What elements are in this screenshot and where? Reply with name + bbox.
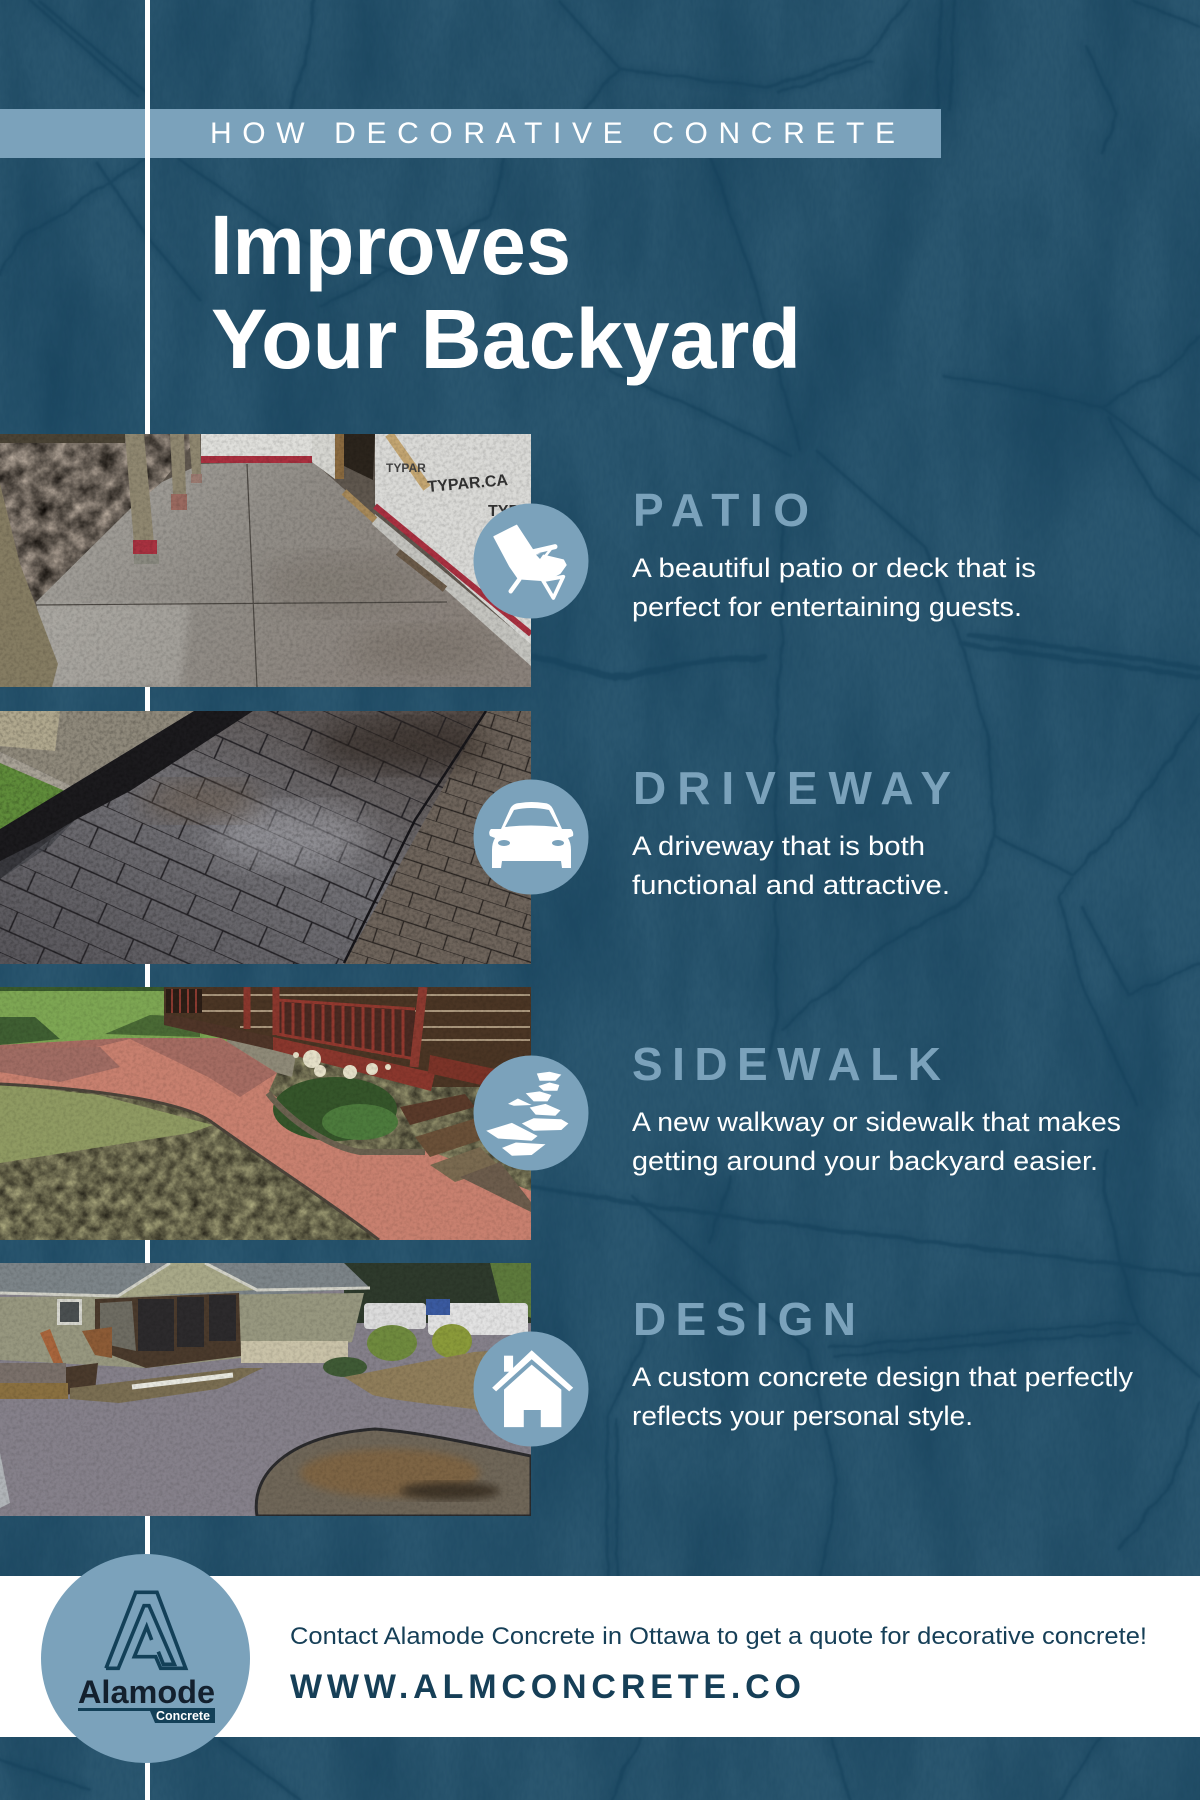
photo: design — [0, 1263, 531, 1516]
heading banner — [0, 109, 941, 158]
icon: beach chair — [474, 504, 588, 618]
section: driveway — [632, 762, 951, 900]
section: sidewalk: SIDEWALK — [632, 1038, 941, 1090]
photo: driveway — [0, 711, 531, 964]
icon: house — [474, 1332, 588, 1446]
section: design — [632, 1293, 1134, 1431]
section: driveway: A driveway that is both — [632, 831, 925, 861]
logo badge: Concrete — [156, 1709, 210, 1723]
section: patio — [632, 484, 1036, 622]
photo: patio: TYPAR — [386, 461, 426, 475]
section: patio: A beautiful patio or deck that is — [632, 553, 1036, 583]
logo badge — [41, 1554, 250, 1763]
footer band — [0, 1576, 1200, 1737]
icon: stepping stones — [474, 1056, 588, 1170]
photo: patio: TYPAR — [488, 503, 541, 520]
footer band: Contact Alamode Concrete in Ottawa to get a quote for decorative concrete! — [290, 1623, 1147, 1650]
photo: patio — [0, 434, 541, 687]
section: sidewalk: getting around your backyard easier. — [632, 1146, 1098, 1176]
title: Improves — [210, 198, 571, 292]
logo badge: Alamode — [78, 1674, 215, 1710]
section: patio: PATIO — [633, 484, 809, 536]
section: design: A custom concrete design that perfectly — [632, 1362, 1134, 1392]
photo: sidewalk — [0, 987, 531, 1240]
vertical white line — [145, 0, 150, 1800]
section: driveway: DRIVEWAY — [633, 762, 951, 814]
section: sidewalk: A new walkway or sidewalk that makes — [632, 1107, 1121, 1137]
title: Your Backyard — [211, 292, 801, 386]
footer band: WWW.ALMCONCRETE.CO — [290, 1668, 801, 1706]
section: design: DESIGN — [633, 1293, 856, 1345]
title — [210, 198, 801, 386]
section: sidewalk — [632, 1038, 1121, 1176]
section: design: reflects your personal style. — [632, 1401, 973, 1431]
section: driveway: functional and attractive. — [632, 870, 950, 900]
icon: car — [474, 780, 588, 894]
heading banner: HOW DECORATIVE CONCRETE — [210, 117, 895, 150]
section: patio: perfect for entertaining guests. — [632, 592, 1022, 622]
photo: patio: TYPAR.CA — [427, 472, 509, 496]
